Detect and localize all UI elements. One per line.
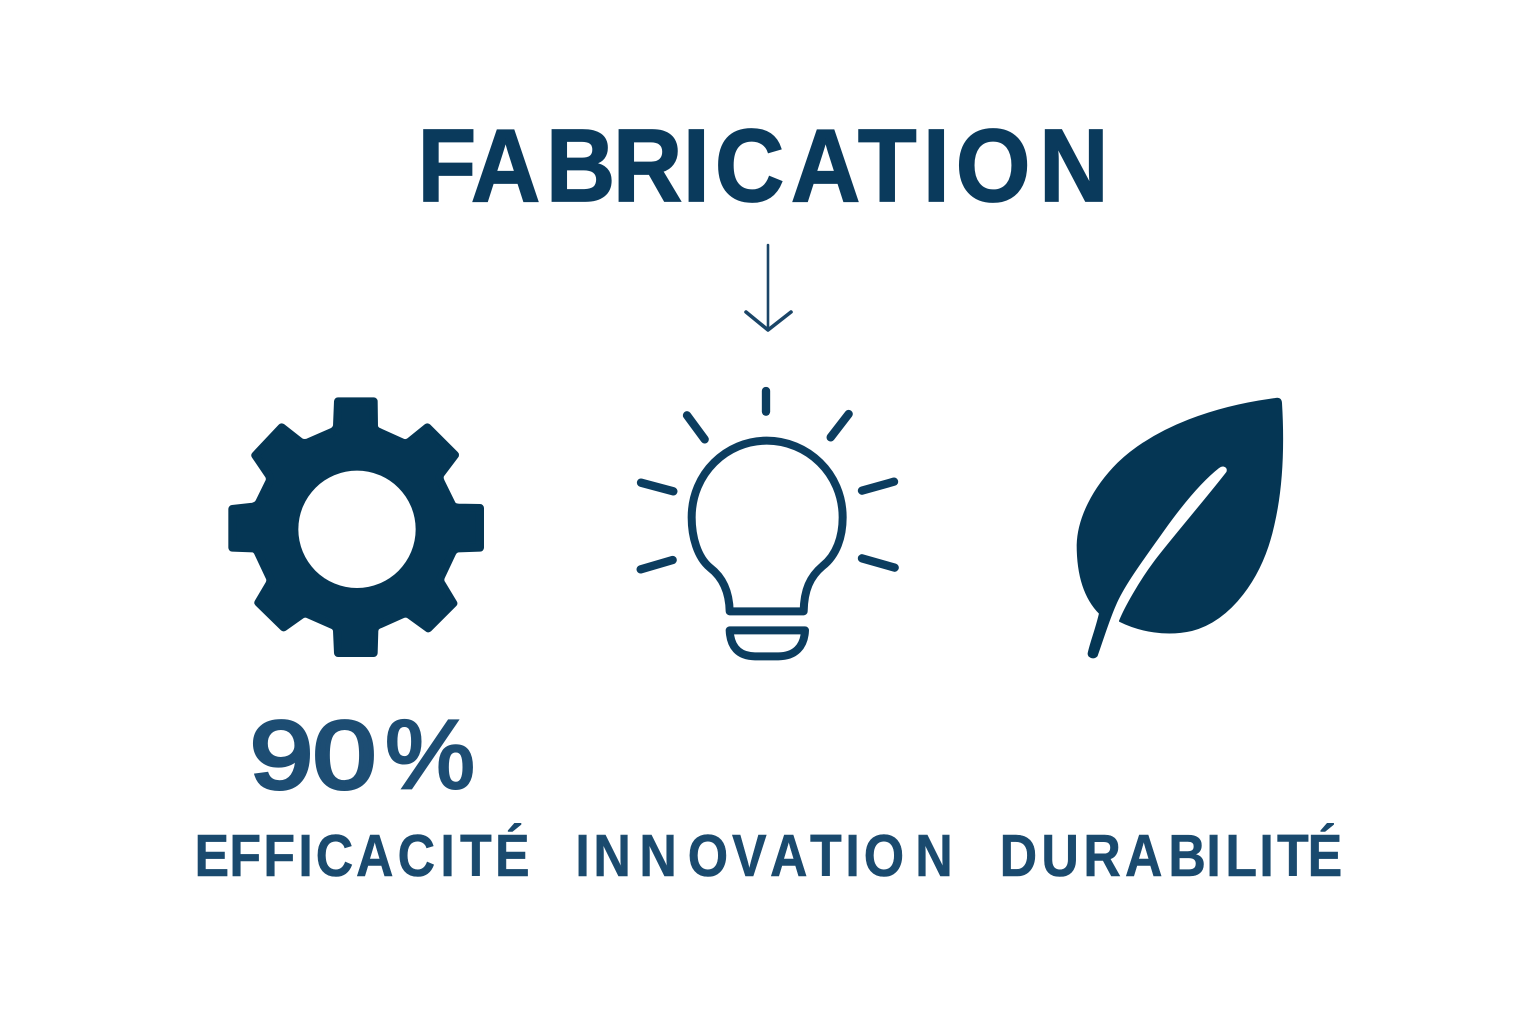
label: efficacité: EFFICACITÉ <box>194 823 530 889</box>
icon: leaf <box>1078 399 1282 657</box>
arrow: down <box>746 245 791 330</box>
label: durabilité: DURABILITÉ <box>1000 823 1342 889</box>
bulb base <box>730 630 805 656</box>
title: FABRICATION <box>418 109 1108 224</box>
statistic: 90% <box>250 700 475 809</box>
label: innovation: INNOVATION <box>575 823 953 889</box>
bulb outline <box>692 441 843 611</box>
icon: gear <box>232 401 480 653</box>
statistic: 90%: % <box>385 700 475 809</box>
icon: light bulb <box>641 391 895 656</box>
light rays <box>641 391 895 569</box>
statistic: 90%: 90 <box>250 702 376 809</box>
